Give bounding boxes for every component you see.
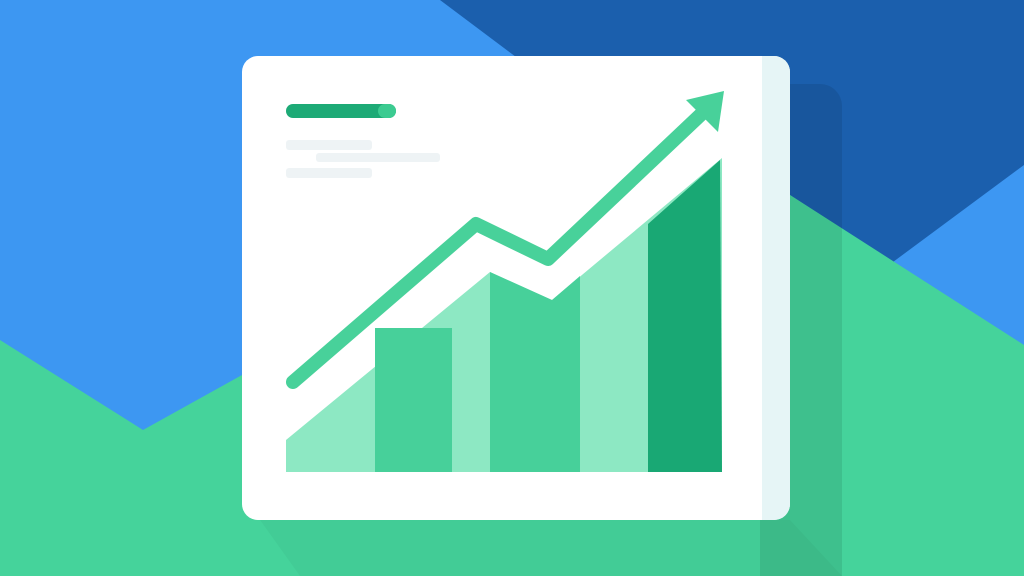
background: green hills bbox=[0, 195, 1024, 576]
card shadow bbox=[260, 84, 842, 576]
bar chart bbox=[286, 158, 722, 472]
text placeholder lines bbox=[286, 140, 440, 178]
card bbox=[242, 56, 790, 520]
arrow: upward trend bbox=[293, 91, 724, 382]
background: dark blue region bbox=[440, 0, 1024, 262]
title bar bbox=[286, 104, 396, 118]
